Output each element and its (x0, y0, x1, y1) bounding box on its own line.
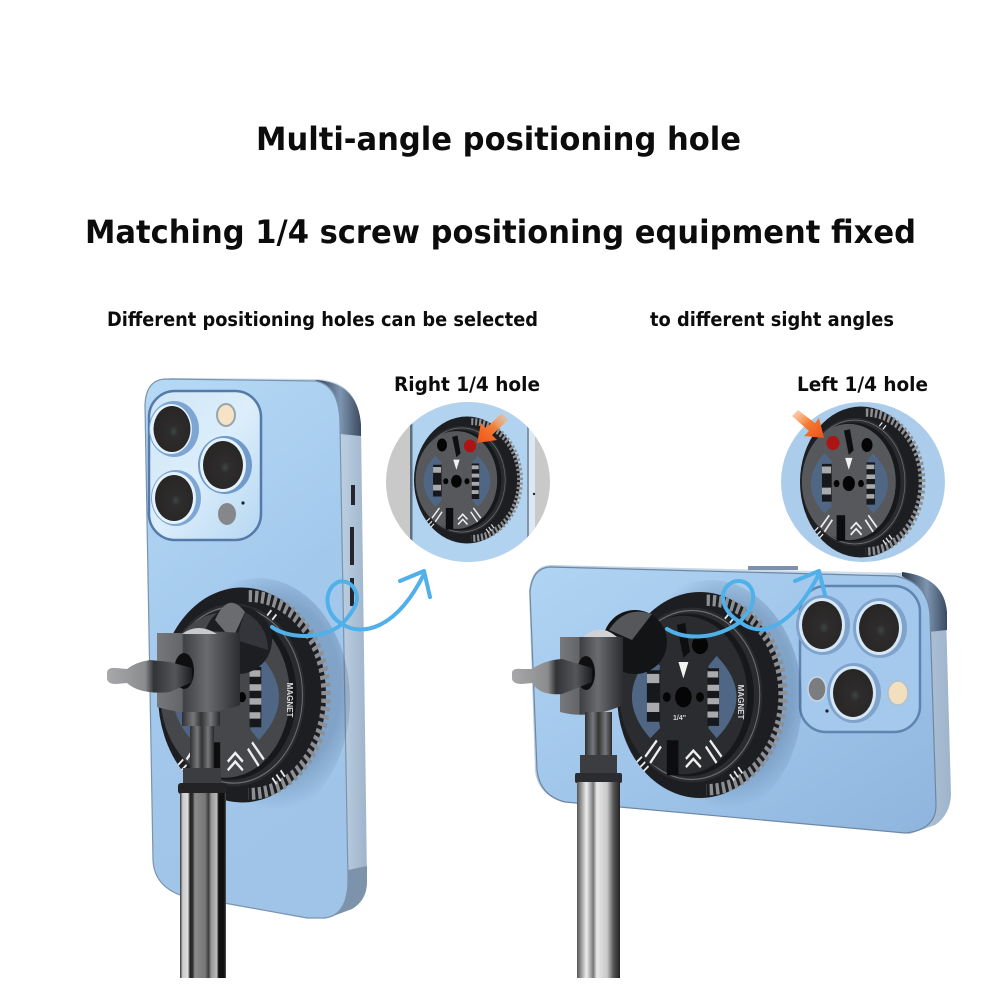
steel corner top (315, 380, 361, 436)
phone frame landscape (529, 565, 951, 834)
phone frame portrait (153, 378, 367, 918)
flash (217, 404, 235, 426)
inset disc (414, 416, 520, 544)
panel: left inset, left hole (781, 402, 945, 562)
ball dome landscape (583, 630, 617, 637)
microphone dot landscape (825, 709, 829, 713)
lidar landscape (808, 677, 826, 701)
knob socket (174, 653, 194, 689)
lens c (827, 663, 881, 723)
orange pointer (477, 413, 508, 443)
arrow: right blue arrow (667, 571, 825, 637)
label: left 1/4 hole: Left 1/4 hole (797, 373, 928, 396)
orange pointer (792, 410, 824, 438)
ball behind head landscape (603, 610, 667, 674)
pole neck (190, 726, 214, 770)
panel: right photo, phone landscape on mount (512, 565, 951, 978)
title: matching 1/4 screw: Matching 1/4 screw positioning equipment fixed (85, 213, 916, 251)
title: multi-angle positioning hole: Multi-angle positioning hole (256, 120, 741, 158)
steel corner bottom (328, 866, 367, 918)
pole ring landscape (575, 773, 622, 783)
knob landscape (512, 659, 592, 694)
lower collar (183, 768, 221, 784)
knob (107, 660, 192, 693)
panel: right inset, right hole (386, 400, 550, 570)
lower collar landscape (580, 755, 617, 774)
phone back landscape (530, 567, 936, 833)
lens a (796, 595, 850, 655)
flash landscape (888, 681, 908, 705)
label: right 1/4 hole: Right 1/4 hole (394, 373, 540, 396)
volume button (748, 566, 798, 570)
magnetic mount disc (158, 588, 326, 802)
inset background (781, 402, 945, 562)
camera island landscape (800, 586, 920, 732)
pole tube landscape (577, 782, 620, 978)
top hole (692, 636, 708, 654)
ball head (157, 632, 240, 713)
red hole (464, 440, 476, 452)
disc shadow landscape (618, 580, 802, 820)
arrow: left blue arrow (272, 571, 430, 636)
phone back portrait (145, 379, 348, 918)
microphone dot (241, 501, 245, 505)
disc label 1/4: 1/4" (673, 715, 686, 722)
steel corner landscape (902, 572, 947, 632)
lidar sensor (218, 503, 236, 525)
inset detail clipped (410, 400, 535, 570)
inset disc (800, 406, 922, 558)
subtitle right: to different sight angles (650, 308, 894, 331)
disc label magnet landscape: MAGNET (736, 685, 745, 719)
lens b (853, 598, 907, 658)
magnetic mount disc landscape (617, 592, 783, 798)
pole neck landscape (585, 712, 612, 756)
camera island portrait (149, 391, 261, 540)
ball dome (182, 628, 217, 634)
subtitle left: Different positioning holes can be selected (107, 308, 538, 331)
upper neck collar (182, 712, 220, 726)
red hole (826, 436, 840, 450)
pole tube (180, 793, 226, 978)
panel: left photo, phone portrait on mount (107, 378, 367, 978)
inset background (386, 402, 550, 562)
ball head landscape (560, 636, 623, 715)
lens right (198, 436, 252, 494)
dark hole (862, 438, 872, 452)
lens bottom left (151, 470, 201, 526)
dark hole (437, 438, 447, 452)
knob socket landscape (577, 656, 595, 690)
pole ring (178, 783, 227, 794)
side buttons portrait (350, 485, 355, 606)
disc shadow (166, 578, 350, 822)
lens top left (149, 401, 199, 457)
disc label magnet: MAGNET (285, 683, 294, 717)
ball behind head (204, 603, 272, 674)
